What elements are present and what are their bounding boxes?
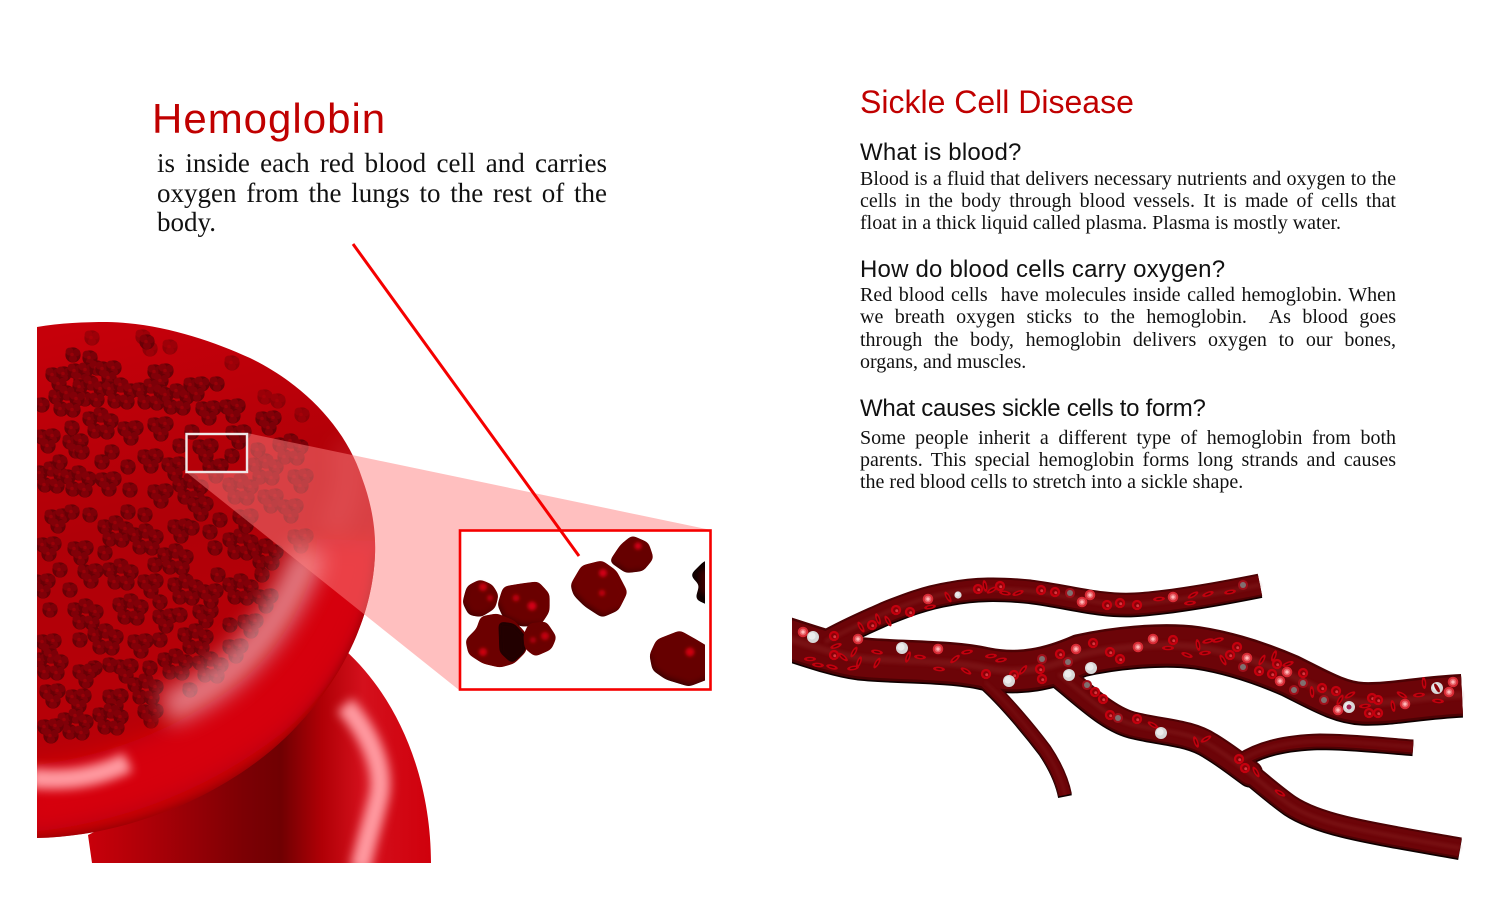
- hemoglobin molecule: [610, 536, 653, 572]
- heading: What is blood?: What is blood?: [860, 139, 1022, 166]
- text block: sickle cause answer: Some people inherit a different type of hemoglobin from both: [860, 427, 1396, 449]
- hemoglobin molecule: [463, 580, 498, 616]
- hemoglobin molecule: [466, 614, 526, 667]
- text block: what is blood answer: [860, 168, 1396, 234]
- text block: what is blood answer: float in a thick liquid called plasma. Plasma is mostly water.: [860, 212, 1341, 234]
- heading: How do blood cells carry oxygen?: How do blood cells carry oxygen?: [860, 256, 1225, 283]
- text block: sickle cause answer: [860, 427, 1396, 493]
- hemoglobin molecule: [650, 631, 705, 686]
- callout: magnification beam: [186, 433, 711, 690]
- hemoglobin molecule: [692, 561, 705, 604]
- callout: magnified hemoglobin inset: [460, 530, 716, 690]
- hemoglobin molecules scattered in the cell: [29, 329, 314, 744]
- text block: what is blood answer: cells in the body through blood vessels. It is made of cells that: [860, 190, 1396, 212]
- text block: what is blood answer: Blood is a fluid that delivers necessary nutrients and oxygen to the: [860, 168, 1396, 190]
- blood cells inside the vessels: [798, 580, 1458, 798]
- hemoglobin molecule: [571, 561, 627, 617]
- rim of the cell: [20, 540, 350, 800]
- title: Hemoglobin: Hemoglobin: [152, 95, 386, 142]
- text block: oxygen answer: through the body, hemoglobin delivers oxygen to our bones,: [860, 329, 1396, 351]
- hemoglobin molecule: [498, 582, 549, 626]
- text block: sickle cause answer: the red blood cells to stretch into a sickle shape.: [860, 471, 1243, 493]
- text block: hemoglobin description: oxygen from the lungs to the rest of the: [157, 178, 607, 208]
- title: Sickle Cell Disease: Sickle Cell Disease: [860, 84, 1134, 120]
- illustration: back red blood cell: [88, 650, 431, 870]
- callout: zoom selection on the cell: [186, 434, 247, 472]
- text block: hemoglobin description: body.: [157, 207, 216, 237]
- text block: oxygen answer: Red blood cells have molecules inside called hemoglobin. When: [860, 284, 1396, 306]
- text block: hemoglobin description: is inside each red blood cell and carries: [157, 148, 607, 178]
- illustration: branching blood vessels: [770, 580, 1462, 850]
- hemoglobin molecule: [524, 622, 556, 656]
- text block: hemoglobin description: [157, 148, 607, 237]
- text block: oxygen answer: [860, 284, 1396, 373]
- heading: What causes sickle cells to form?: What causes sickle cells to form?: [860, 395, 1206, 422]
- text block: oxygen answer: we breath oxygen sticks to the hemoglobin. As blood goes: [860, 306, 1396, 328]
- arrow: leader line from text to hemoglobin: [353, 244, 579, 556]
- text block: oxygen answer: organs, and muscles.: [860, 351, 1026, 373]
- illustration: front red blood cell with hemoglobin: [20, 315, 380, 845]
- text block: sickle cause answer: parents. This special hemoglobin forms long strands and causes: [860, 449, 1396, 471]
